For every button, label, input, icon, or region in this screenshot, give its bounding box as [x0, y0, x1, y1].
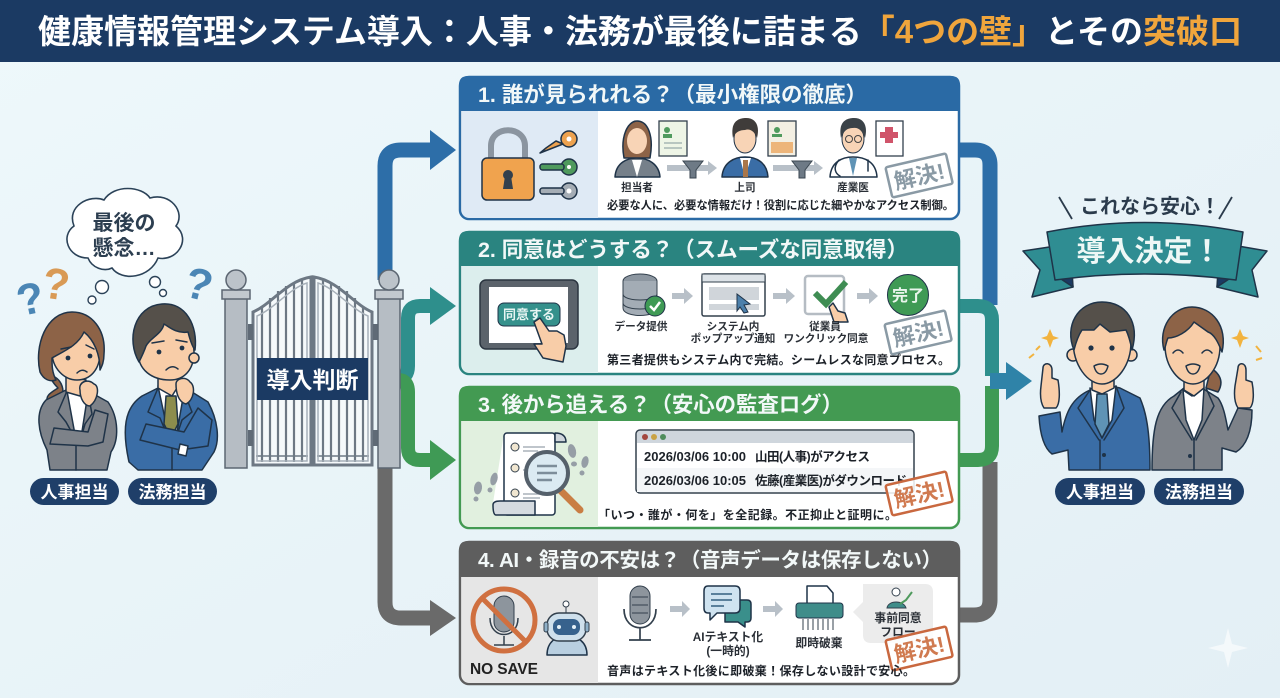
flow: occupational physician: 産業医 — [837, 181, 869, 194]
question marks: ? — [39, 259, 73, 311]
access log window: 2026/03/06 10:00 — [644, 449, 746, 464]
thought cloud: 最後の — [92, 212, 156, 235]
resolved stamp — [885, 153, 953, 198]
flow: microphone — [624, 586, 656, 640]
role labels left — [30, 478, 217, 505]
icon: robot — [544, 601, 589, 655]
icon: keys — [540, 131, 577, 199]
question marks: ? — [12, 273, 49, 326]
thought cloud: 懸念… — [92, 237, 156, 260]
flow: one click consent — [784, 276, 869, 345]
sparkles — [1029, 329, 1262, 360]
flow: instant shredding — [795, 586, 843, 650]
resolved stamp: 解決! — [891, 316, 946, 351]
prior consent flow callout: 事前同意 — [874, 611, 922, 625]
corner sparkle — [1208, 628, 1248, 668]
flow: manager: 上司 — [734, 181, 756, 194]
icon: footprints — [473, 443, 590, 502]
panel 4: AI and recording — [459, 541, 960, 684]
flow: staff — [615, 121, 687, 194]
flow: AI text conversion: AIテキスト化 — [693, 630, 763, 644]
access log window — [636, 430, 914, 493]
panel 1 summary: 必要な人に、必要な情報だけ！役割に応じた細やかなアクセス制御。 — [607, 198, 954, 212]
flow: popup notice: ポップアップ通知 — [691, 332, 775, 345]
panel 4 summary: 音声はテキスト化後に即破棄！保存しない設計で安心。 — [607, 663, 915, 678]
role labels right — [1055, 478, 1244, 505]
resolved stamp: 解決! — [892, 477, 947, 512]
panel 1 heading: 1. 誰が見られれる？（最小権限の徹底） — [478, 82, 867, 107]
question marks — [12, 258, 218, 326]
role labels left: 人事担当 — [40, 483, 108, 502]
flow: AI text conversion — [693, 586, 763, 658]
resolved stamp — [884, 310, 952, 355]
gate sign — [257, 358, 368, 400]
happy man — [1039, 302, 1150, 470]
flow: instant shredding: 即時破棄 — [795, 636, 843, 650]
panel 2 summary: 第三者提供もシステム内で完結。シームレスな同意プロセス。 — [607, 352, 950, 367]
arrow with filter — [773, 161, 823, 178]
panel 3 summary: 「いつ・誰が・何を」を全記録。不正抑止と証明に。 — [598, 507, 897, 522]
decision ribbon: 導入決定！ — [1076, 235, 1222, 268]
decision ribbon — [1023, 222, 1267, 297]
icon: tablet with consent button — [480, 280, 578, 362]
title banner: 健康情報管理システム導入：人事・法務が最後に詰まる「4つの壁」とその突破口 — [38, 13, 1242, 50]
no save label: NO SAVE — [470, 661, 538, 678]
icon: padlock — [482, 130, 534, 200]
arrow with filter — [667, 161, 717, 178]
arrow — [857, 288, 878, 304]
flow: one click consent: 従業員 — [809, 320, 841, 333]
prior consent flow callout — [853, 584, 933, 643]
resolved stamp — [885, 626, 953, 671]
role labels right: 法務担当 — [1165, 483, 1233, 502]
flow: data provision — [615, 274, 668, 333]
flow: manager — [722, 118, 796, 194]
arrow — [763, 601, 783, 617]
flow: staff: 担当者 — [621, 181, 653, 194]
gate — [222, 270, 403, 468]
flow: data provision: データ提供 — [615, 320, 668, 333]
access log window: 佐藤(産業医)がダウンロード — [755, 473, 907, 488]
flow: AI text conversion: (一時的) — [706, 644, 750, 658]
panel 1: access control — [459, 76, 960, 219]
flow: occupational physician — [830, 118, 903, 194]
connectors from gate to panels — [385, 130, 456, 636]
resolved stamp: 解決! — [892, 632, 947, 667]
access log window: 2026/03/06 10:05 — [644, 473, 746, 488]
icon: tablet with consent button: 同意する — [503, 307, 555, 322]
role labels right: 人事担当 — [1066, 483, 1134, 502]
flow: popup notice — [691, 274, 775, 345]
thought cloud — [67, 188, 183, 304]
access log window: 山田(人事)がアクセス — [755, 449, 870, 464]
icon: no recording microphone — [473, 589, 535, 651]
connectors from panels to decision — [955, 150, 1032, 615]
complete badge: 完了 — [892, 287, 924, 305]
panel 2 heading: 2. 同意はどうする？（スムーズな同意取得） — [478, 237, 908, 262]
resolved stamp — [885, 471, 953, 516]
panel 3 heading: 3. 後から追える？（安心の監査ログ） — [478, 392, 843, 417]
arrow — [670, 601, 690, 617]
panel 3: audit log — [459, 386, 960, 528]
arrow — [672, 288, 693, 304]
arrow — [773, 288, 795, 304]
flow: one click consent: ワンクリック同意 — [784, 332, 869, 345]
flow: popup notice: システム内 — [707, 320, 759, 333]
role labels left: 法務担当 — [138, 483, 206, 502]
icon: audit document and magnifier — [493, 433, 580, 515]
worried woman — [38, 312, 117, 470]
title banner — [0, 0, 1280, 62]
complete badge — [888, 274, 928, 316]
happy woman — [1152, 307, 1253, 470]
panel 4 heading: 4. AI・録音の不安は？（音声データは保存しない） — [478, 548, 942, 572]
resolved stamp: 解決! — [892, 159, 947, 194]
panel 2: consent — [459, 231, 960, 374]
gate sign: 導入判断 — [266, 367, 358, 393]
question marks: ? — [180, 258, 218, 312]
reassurance caption: これなら安心！ — [1080, 195, 1220, 218]
worried man — [125, 304, 217, 470]
prior consent flow callout: フロー — [880, 625, 916, 639]
